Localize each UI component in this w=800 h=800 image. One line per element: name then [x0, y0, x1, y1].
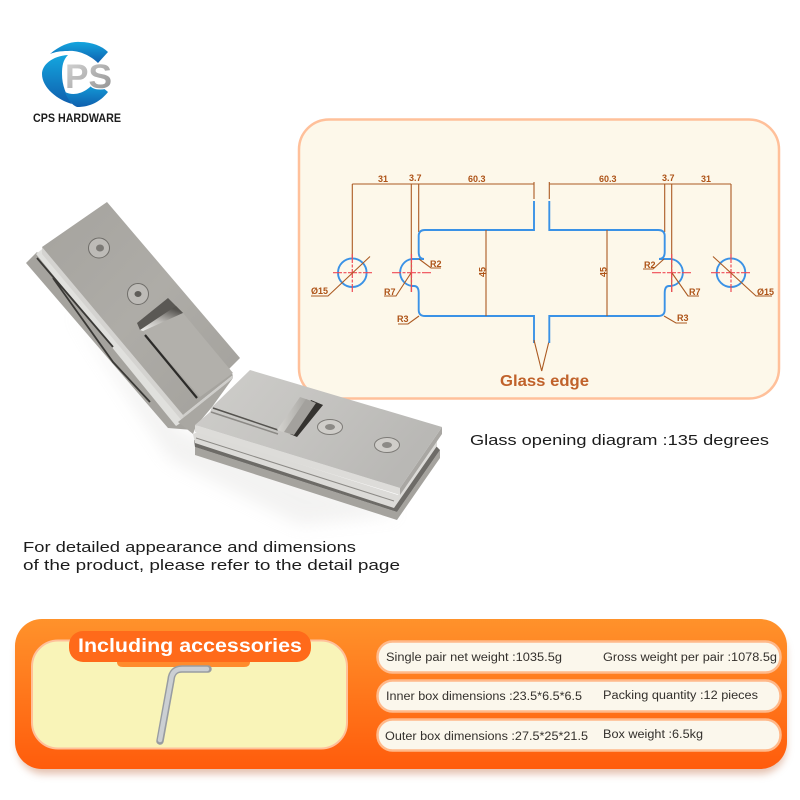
pill tab	[117, 655, 250, 667]
label: glass edge: Glass edge	[500, 373, 589, 390]
drawing: right half: Ø15	[757, 287, 774, 297]
heading: including accessories: Including accessories	[78, 635, 302, 657]
panel: glass opening diagram	[299, 120, 779, 398]
hinge joint	[178, 378, 233, 434]
heading: including accessories	[69, 631, 311, 662]
drawing: left half	[311, 173, 549, 371]
drawing: left half: 60.3	[468, 174, 486, 184]
hinge shadow	[70, 310, 400, 525]
panel: specifications	[15, 619, 787, 769]
logo letters PS: PS	[65, 58, 112, 96]
drawing: right half: R3	[677, 313, 689, 323]
logo: CPS Hardware	[33, 42, 121, 125]
drawing: right half: R7	[689, 287, 701, 297]
spec row 1: Gross weight per pair :1078.5g	[603, 652, 777, 664]
drawing: right half: 31	[701, 174, 711, 184]
drawing: left half: R2	[430, 259, 442, 269]
text: product note	[23, 540, 400, 574]
spec row 2: Inner box dimensions :23.5*6.5*6.5	[386, 691, 582, 703]
drawing: left half: R3	[397, 314, 409, 324]
hinge slot	[137, 298, 183, 330]
panel: accessories	[32, 631, 347, 748]
drawing: left half: Ø15	[311, 286, 328, 296]
screw	[374, 438, 400, 452]
drawing: right half	[549, 173, 774, 343]
drawing: left half: 45	[478, 267, 488, 277]
screw	[88, 238, 110, 258]
screw	[318, 420, 342, 434]
spec row 1	[378, 642, 780, 672]
lower hinge plate	[193, 370, 442, 520]
spec row 3: Outer box dimensions :27.5*25*21.5	[385, 731, 588, 743]
drawing: right half: 60.3	[599, 174, 617, 184]
text: product note: For detailed appearance and dimensions	[23, 540, 356, 556]
drawing: right half: 45	[598, 267, 608, 277]
drawing: left half: 3.7	[409, 173, 422, 183]
caption: glass opening diagram: Glass opening diagram :135 degrees	[470, 433, 769, 449]
spec row 3: Box weight :6.5kg	[603, 729, 703, 741]
upper hinge plate	[26, 202, 240, 430]
drawing: right half: R2	[644, 260, 656, 270]
product photo: hinge	[26, 202, 442, 525]
drawing: left half: R7	[384, 287, 396, 297]
text: product note: of the product, please refer to the detail page	[23, 558, 400, 574]
spec row 3	[378, 720, 780, 750]
spec row 1: Single pair net weight :1035.5g	[386, 652, 562, 664]
spec row 2: Packing quantity :12 pieces	[603, 690, 758, 702]
screw	[128, 284, 148, 304]
logo name: CPS HARDWARE	[33, 113, 121, 125]
spec row 2	[378, 680, 780, 712]
icon: blue C mark	[42, 42, 108, 107]
drawing: right half: 3.7	[662, 173, 675, 183]
panel shadow	[18, 628, 786, 774]
icon: allen key	[160, 669, 208, 741]
drawing: left half: 31	[378, 174, 388, 184]
